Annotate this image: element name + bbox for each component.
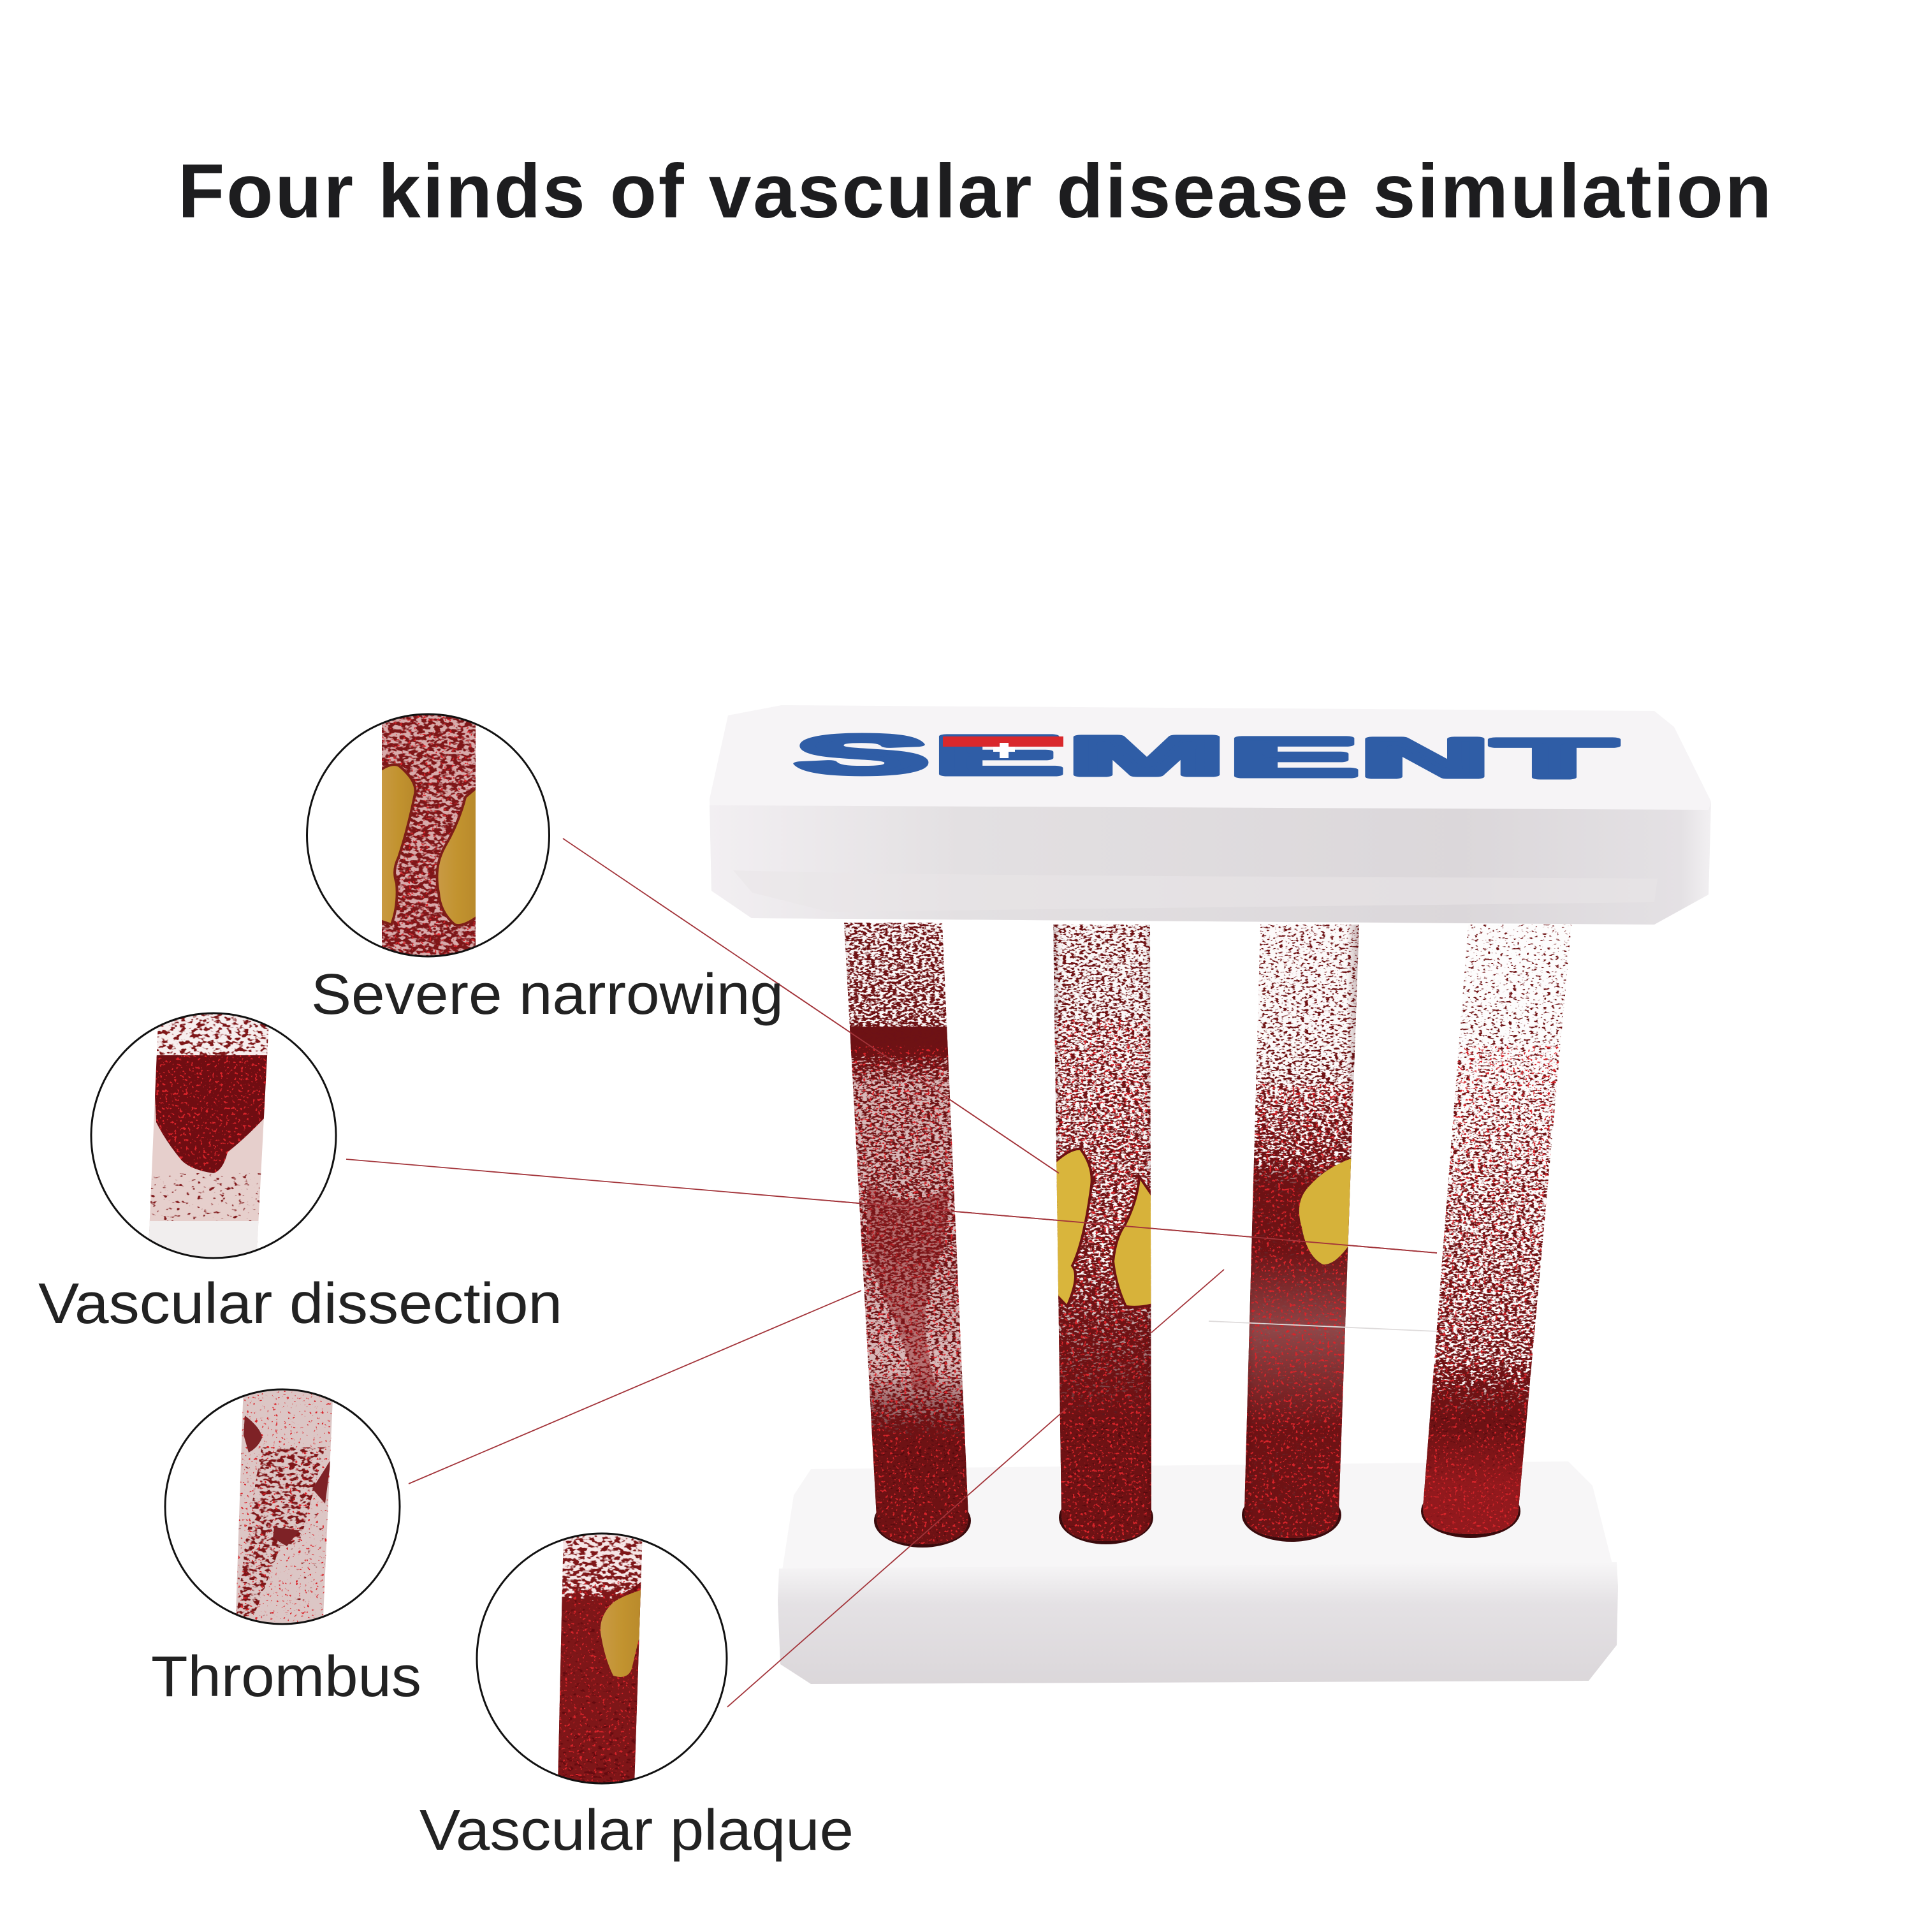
- clot marks: [244, 1416, 262, 1453]
- title: Four kinds of vascular disease simulation: [178, 149, 1772, 234]
- plaque right: [437, 786, 478, 925]
- logo red cross bar: [943, 736, 1063, 758]
- line: thrombus: [409, 1291, 861, 1484]
- label: severe narrowing: Severe narrowing: [311, 963, 783, 1027]
- logo: SEMENT: E: [1229, 727, 1358, 788]
- plaque left: [1055, 1149, 1092, 1306]
- label: thrombus: Thrombus: [151, 1645, 421, 1709]
- vascular model: [710, 705, 1711, 1684]
- detail circle: vascular plaque: [477, 1530, 727, 1785]
- line: severe narrowing: [563, 838, 1059, 1173]
- detail circle: thrombus: [165, 1384, 400, 1632]
- plaque: [601, 1589, 644, 1677]
- tube 1: thrombus and dissection: [844, 923, 968, 1544]
- tube 4: dissection: [1423, 925, 1571, 1534]
- label: vascular plaque: Vascular plaque: [419, 1799, 854, 1862]
- tube 3: vascular plaque: [1244, 925, 1359, 1538]
- logo: SEMENT: E: [934, 725, 1063, 786]
- tube 2: severe narrowing: [1053, 925, 1151, 1541]
- detail circle: vascular dissection: [91, 1007, 336, 1266]
- connector lines: [346, 838, 1437, 1484]
- logo: SEMENT: M: [1068, 726, 1225, 787]
- line: vascular plaque: [727, 1270, 1224, 1707]
- top bar: [710, 705, 1711, 925]
- plaque: [1299, 1157, 1355, 1264]
- label: vascular dissection: Vascular dissection: [38, 1272, 562, 1336]
- plaque left: [380, 765, 415, 925]
- tube sockets: [874, 1484, 1520, 1548]
- base block: [778, 1461, 1618, 1684]
- logo: SEMENT: S: [796, 724, 928, 786]
- logo: SEMENT: [796, 724, 1615, 789]
- logo: SEMENT: N: [1360, 728, 1489, 789]
- line: vascular dissection: [346, 1159, 1437, 1253]
- detail circle: severe narrowing: [307, 708, 550, 963]
- dark clot: [153, 1055, 274, 1173]
- plaque right: [1113, 1176, 1157, 1307]
- logo: SEMENT: T: [1494, 728, 1615, 789]
- line overlays across the model: [765, 975, 1437, 1331]
